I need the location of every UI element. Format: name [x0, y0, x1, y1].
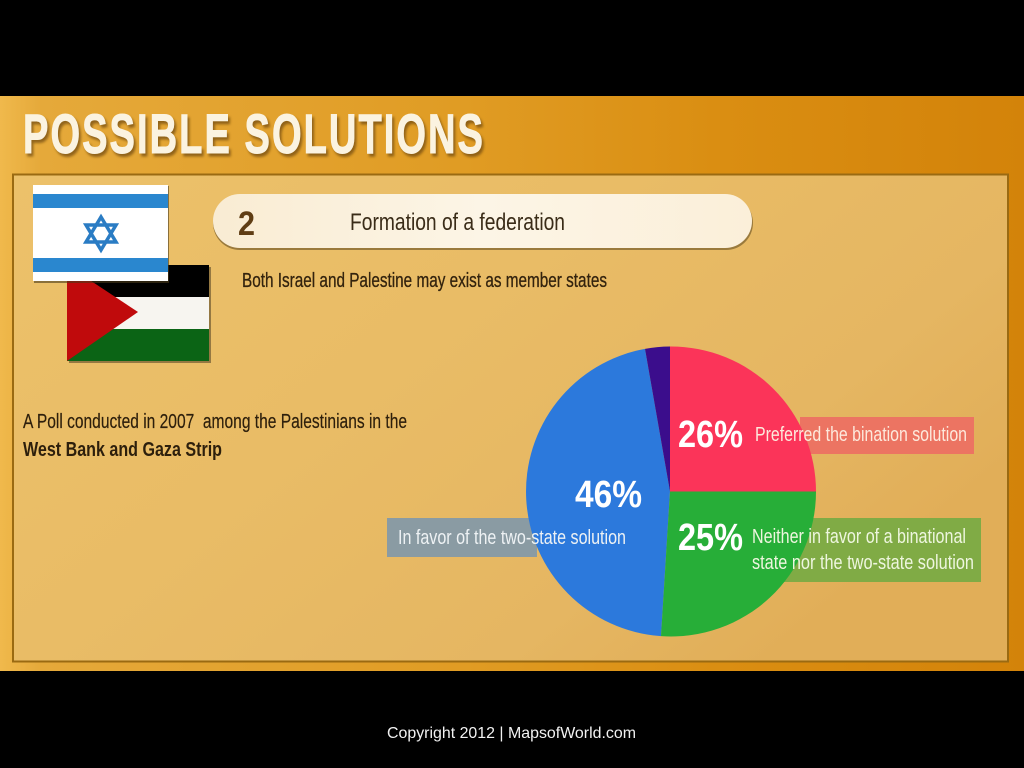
- label: 25%: [678, 517, 974, 574]
- title: [23, 102, 487, 168]
- icon: Palestine flag: [67, 265, 211, 363]
- label: 26%: [678, 414, 967, 456]
- bottom black bar: [0, 671, 1024, 768]
- pie chart: [526, 346, 816, 636]
- golden background band: [0, 96, 1024, 671]
- text block: poll description: West Bank and Gaza Strip: [23, 439, 222, 461]
- label: 26%: Preferred the bination solution: [755, 424, 967, 446]
- slice: green 25%: [661, 492, 816, 636]
- text block: poll description: A Poll conducted in 2007 among the Palestinians in the: [23, 411, 407, 433]
- text block: poll description: [23, 411, 407, 461]
- label: 25%: Neither in favor of a binational: [752, 526, 966, 548]
- title: POSSIBLE SOLUTIONS: [23, 102, 485, 165]
- label: 46%: 46%: [575, 474, 642, 516]
- label: 25%: state nor the two-state solution: [752, 552, 974, 574]
- label background: red: [800, 417, 974, 454]
- icon: star of David: [86, 217, 116, 250]
- slice: blue 46%: [526, 349, 670, 636]
- slice: purple: [645, 346, 670, 492]
- top black bar: [0, 0, 1024, 96]
- copyright footer: Copyright 2012 | MapsofWorld.com: [387, 725, 636, 742]
- text block: subheading: Both Israel and Palestine may exist as member states: [242, 270, 607, 292]
- label: 25%: 25%: [678, 517, 743, 559]
- label: 26%: 26%: [678, 414, 743, 456]
- slice: red 26%: [670, 346, 816, 492]
- icon: Israel flag: [33, 185, 169, 283]
- title: POSSIBLE SOLUTIONS: [25, 105, 487, 168]
- heading pill: [213, 194, 753, 250]
- label: 46%: [398, 474, 642, 549]
- label: 46%: In favor of the two-state solution: [398, 527, 626, 549]
- panel: content area: [13, 174, 1008, 662]
- label background: green: [780, 518, 981, 582]
- heading text: Formation of a federation: [350, 209, 565, 236]
- step number: 2: [238, 205, 255, 243]
- label background: grey-blue: [387, 518, 537, 557]
